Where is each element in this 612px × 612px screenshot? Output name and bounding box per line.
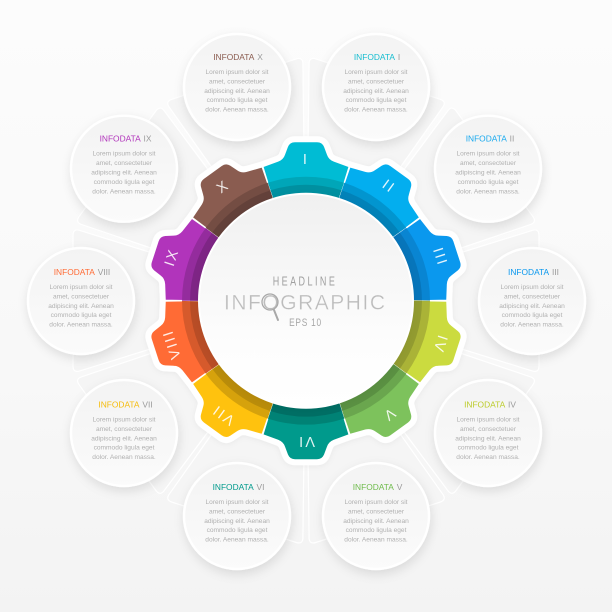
bubble V: adipiscing elit. Aenean [343, 518, 409, 525]
bubble II: amet, consectetuer [460, 160, 517, 167]
bubble X: adipiscing elit. Aenean [204, 88, 270, 95]
bubble III [479, 248, 585, 354]
gear [141, 142, 471, 460]
bubble III: dolor. Aenean massa. [500, 322, 564, 329]
segment VII [178, 354, 284, 455]
bubble X: commodo ligula eget [207, 97, 268, 104]
bubble I: commodo ligula eget [346, 97, 407, 104]
bubble VII: amet, consectetuer [96, 426, 153, 433]
bubble II: adipiscing elit. Aenean [455, 169, 521, 176]
bubble VIII: commodo ligula eget [51, 312, 112, 319]
bubble IV: dolor. Aenean massa. [456, 454, 520, 461]
segment V [328, 354, 434, 455]
bubble III: commodo ligula eget [502, 312, 563, 319]
segment I: I [303, 152, 309, 168]
segment X [178, 147, 284, 247]
bubble VIII: INFODATA VIII [54, 267, 110, 277]
bubble IX: Lorem ipsum dolor sit [92, 151, 156, 158]
bubble II: commodo ligula eget [458, 179, 519, 186]
bubble III: adipiscing elit. Aenean [499, 303, 565, 310]
bubble VII: INFODATA VII [98, 400, 153, 410]
bubble III: INFODATA III [508, 267, 559, 277]
segment II: II [379, 177, 398, 197]
bubble V [323, 463, 429, 569]
bubble IV: Lorem ipsum dolor sit [456, 416, 520, 424]
segment VIII [141, 290, 227, 391]
bubble IV: adipiscing elit. Aenean [455, 435, 521, 442]
bubble I: amet, consectetuer [348, 78, 405, 85]
segment VI [263, 398, 349, 460]
bubble I: adipiscing elit. Aenean [343, 88, 409, 95]
bubble VIII: Lorem ipsum dolor sit [49, 284, 113, 291]
segment IV: IV [429, 333, 450, 355]
bubble II: INFODATA II [466, 134, 514, 144]
bubble IV [435, 380, 541, 486]
edition label: EPS 10 [289, 317, 322, 329]
center circle [199, 194, 413, 408]
bubble X: amet, consectetuer [209, 78, 266, 85]
bubble IX [71, 116, 177, 222]
bubble II: Lorem ipsum dolor sit [456, 151, 520, 158]
segment X: X [214, 177, 233, 197]
bubble VIII: amet, consectetuer [53, 293, 110, 300]
segment I [263, 142, 349, 203]
bubble VIII: adipiscing elit. Aenean [48, 303, 114, 310]
bubble III: Lorem ipsum dolor sit [500, 284, 564, 291]
bubble II: dolor. Aenean massa. [456, 188, 520, 195]
bubble VI [184, 463, 290, 569]
connector panels behind bubbles [73, 57, 539, 544]
gear white halo [141, 142, 471, 460]
bubble III: amet, consectetuer [504, 293, 561, 300]
bubble V: amet, consectetuer [348, 508, 405, 515]
headline label: HEADLINE [273, 275, 337, 289]
bubble V: INFODATA V [353, 482, 403, 492]
bubble IV: commodo ligula eget [458, 445, 519, 452]
bubble II [435, 116, 541, 222]
segment IX: IX [162, 246, 183, 268]
bubble X: Lorem ipsum dolor sit [205, 69, 269, 76]
bubble I: INFODATA I [354, 52, 400, 62]
bubble VIII: dolor. Aenean massa. [49, 322, 113, 329]
bubble V: dolor. Aenean massa. [344, 537, 408, 544]
segment IV [385, 290, 471, 391]
bubble VI: commodo ligula eget [207, 527, 268, 534]
segment IX [141, 211, 227, 311]
bubble VI: adipiscing elit. Aenean [204, 518, 270, 525]
center headline [224, 275, 385, 329]
bubble IX: INFODATA IX [100, 134, 152, 144]
bubble I: Lorem ipsum dolor sit [344, 69, 408, 76]
segment VIII: VIII [160, 327, 185, 361]
bubble X: dolor. Aenean massa. [205, 107, 269, 114]
segment II [328, 147, 434, 247]
bubble X: INFODATA X [213, 52, 263, 62]
bubble VI: amet, consectetuer [209, 508, 266, 515]
bubble VI: Lorem ipsum dolor sit [205, 499, 269, 506]
bubble V: Lorem ipsum dolor sit [344, 499, 408, 506]
segment III [385, 211, 471, 311]
segment III: III [429, 246, 450, 269]
segment VI: VI [297, 433, 315, 449]
bubble VII: adipiscing elit. Aenean [91, 435, 157, 442]
bubble I [323, 34, 429, 140]
bubble VII: commodo ligula eget [94, 445, 155, 452]
bubble VII [71, 380, 177, 486]
infographic word: INFOGRAPHIC [224, 292, 385, 314]
bubble X [184, 34, 290, 140]
segment VII: VII [209, 401, 238, 428]
bubble VI: dolor. Aenean massa. [205, 537, 269, 544]
segment V: V [379, 404, 398, 424]
bubble IX: commodo ligula eget [94, 179, 155, 186]
bubble IX: adipiscing elit. Aenean [91, 169, 157, 176]
icon: magnifier [262, 294, 278, 320]
bubble IV: INFODATA IV [464, 400, 516, 410]
bubble VII: Lorem ipsum dolor sit [92, 416, 156, 424]
bubble VI: INFODATA VI [213, 482, 264, 492]
bubble VIII [28, 248, 134, 354]
bubble VII: dolor. Aenean massa. [92, 454, 156, 461]
bubble V: commodo ligula eget [346, 527, 407, 534]
bubble IX: amet, consectetuer [96, 160, 153, 167]
bubble I: dolor. Aenean massa. [344, 107, 408, 114]
bubble IX: dolor. Aenean massa. [92, 188, 156, 195]
bubble IV: amet, consectetuer [460, 426, 517, 433]
